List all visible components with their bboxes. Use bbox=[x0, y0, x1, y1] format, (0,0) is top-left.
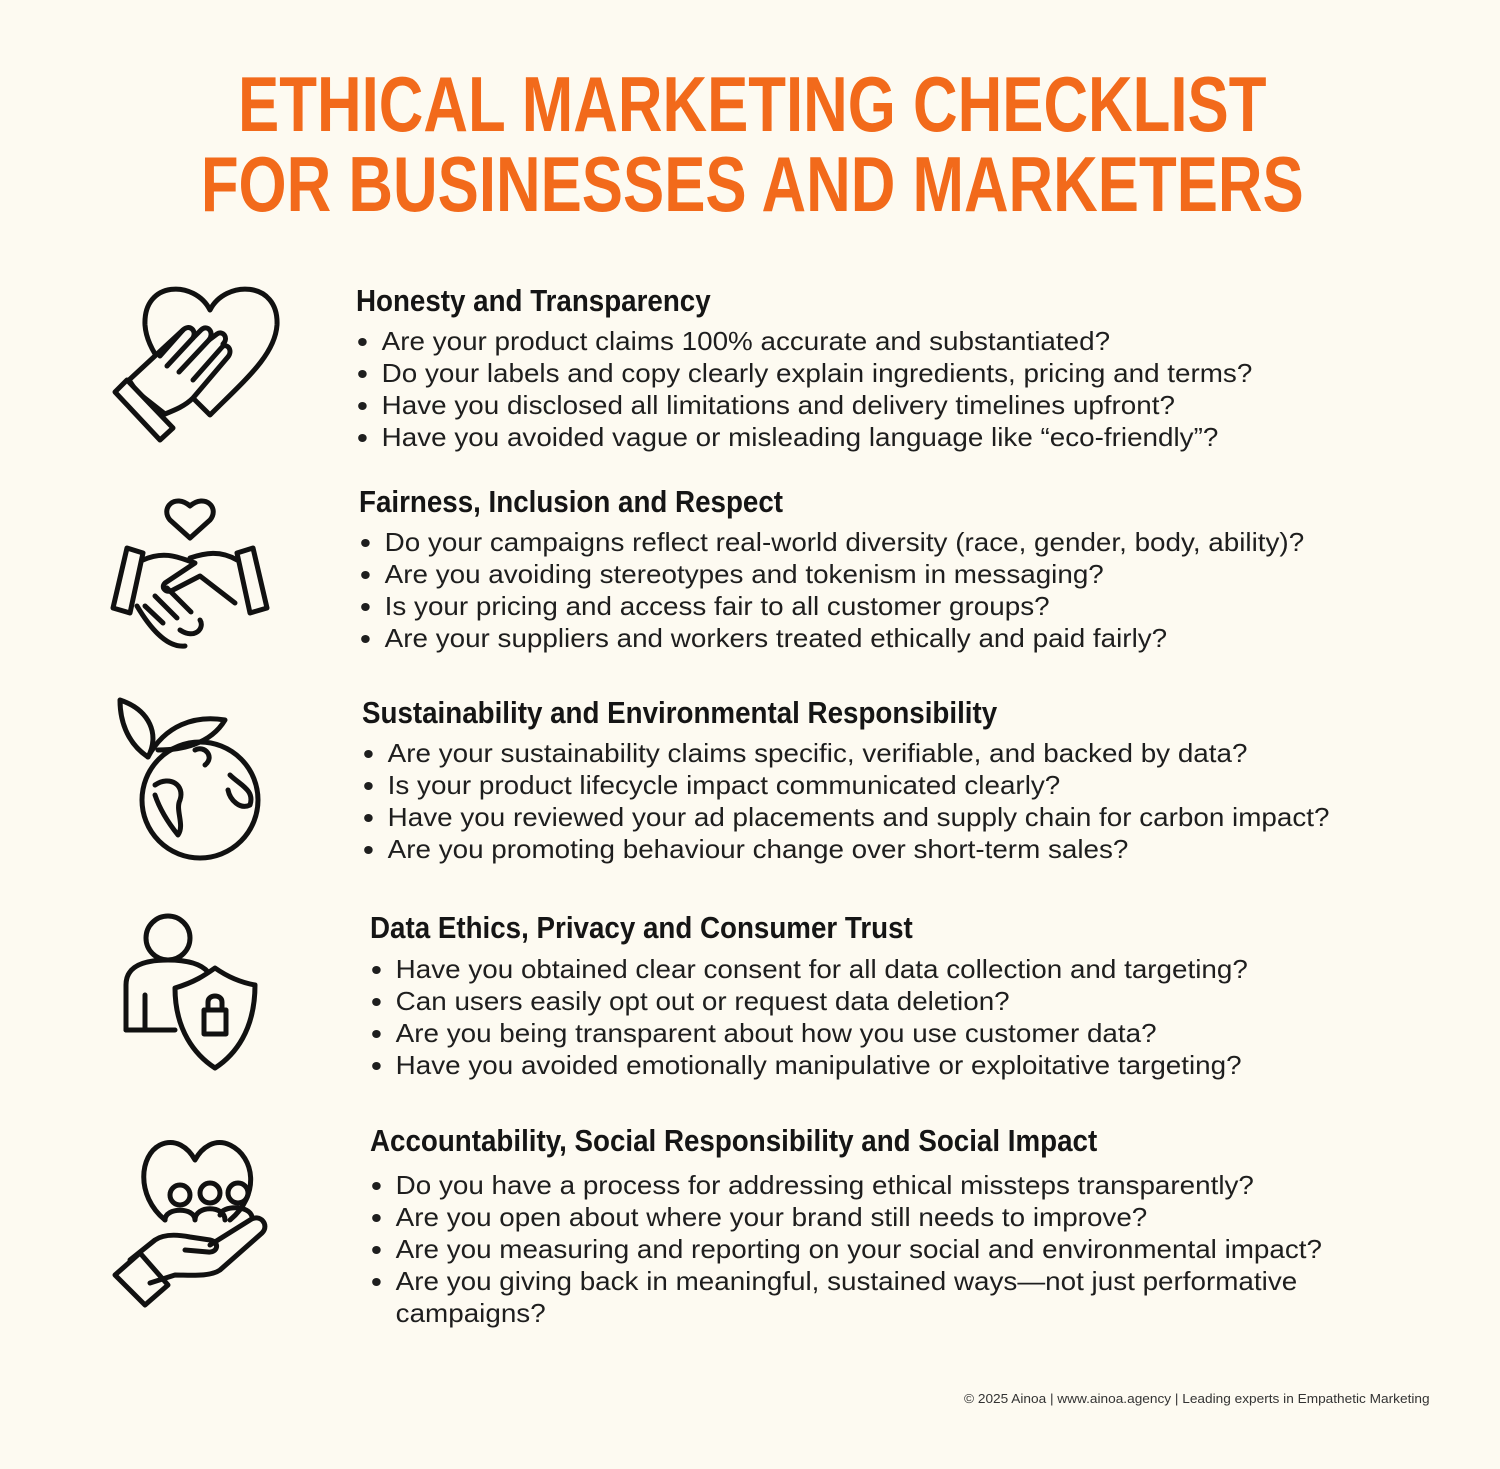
footer: © 2025 Ainoa | www.ainoa.agency | Leading experts in Empathetic Marketing bbox=[964, 1391, 1430, 1406]
text: Is your pricing and access fair to all customer groups? bbox=[385, 591, 1050, 621]
section: honesty: Honesty and Transparency bbox=[356, 283, 711, 318]
icon: handshake with heart bbox=[110, 498, 270, 649]
text: Do your campaigns reflect real-world diversity (race, gender, body, ability)? bbox=[385, 527, 1304, 557]
text: Are your sustainability claims specific, verifiable, and backed by data? bbox=[388, 738, 1247, 768]
section: fairness: Fairness, Inclusion and Respect bbox=[359, 484, 783, 519]
text: Are your suppliers and workers treated ethically and paid fairly? bbox=[385, 623, 1167, 653]
text: Have you obtained clear consent for all data collection and targeting? bbox=[396, 954, 1248, 984]
icon: earth with leaf bbox=[118, 698, 260, 860]
section: sustainability: Sustainability and Environmental Responsibility bbox=[362, 695, 997, 730]
icon: hand holding heart with people bbox=[112, 1140, 268, 1308]
text: Do you have a process for addressing ethical missteps transparently? bbox=[396, 1170, 1254, 1200]
text: Is your product lifecycle impact communicated clearly? bbox=[388, 770, 1060, 800]
text: Have you avoided emotionally manipulative or exploitative targeting? bbox=[396, 1050, 1242, 1080]
text: Can users easily opt out or request data deletion? bbox=[396, 986, 1010, 1016]
text: Have you disclosed all limitations and delivery timelines upfront? bbox=[382, 390, 1175, 420]
title: FOR BUSINESSES AND MARKETERS bbox=[201, 140, 1304, 228]
text: campaigns? bbox=[396, 1298, 546, 1328]
text: Are you promoting behaviour change over short-term sales? bbox=[388, 834, 1128, 864]
text: Are your product claims 100% accurate and substantiated? bbox=[382, 326, 1110, 356]
text: Have you reviewed your ad placements and supply chain for carbon impact? bbox=[388, 802, 1329, 832]
text: Are you giving back in meaningful, sustained ways—not just performative bbox=[396, 1266, 1297, 1296]
section: data ethics: Data Ethics, Privacy and Consumer Trust bbox=[370, 910, 913, 945]
text: Are you avoiding stereotypes and tokenism in messaging? bbox=[385, 559, 1104, 589]
text: Are you measuring and reporting on your social and environmental impact? bbox=[396, 1234, 1322, 1264]
icon: person with shield lock bbox=[124, 914, 258, 1070]
icon: hand on heart bbox=[112, 286, 280, 442]
title: ETHICAL MARKETING CHECKLIST bbox=[238, 60, 1267, 148]
text: Have you avoided vague or misleading language like “eco-friendly”? bbox=[382, 422, 1218, 452]
title bbox=[201, 60, 1304, 228]
text: Are you being transparent about how you use customer data? bbox=[396, 1018, 1157, 1048]
text: Are you open about where your brand still needs to improve? bbox=[396, 1202, 1147, 1232]
section: accountability: Accountability, Social Responsibility and Social Impact bbox=[370, 1123, 1097, 1158]
text: Do your labels and copy clearly explain ingredients, pricing and terms? bbox=[382, 358, 1252, 388]
